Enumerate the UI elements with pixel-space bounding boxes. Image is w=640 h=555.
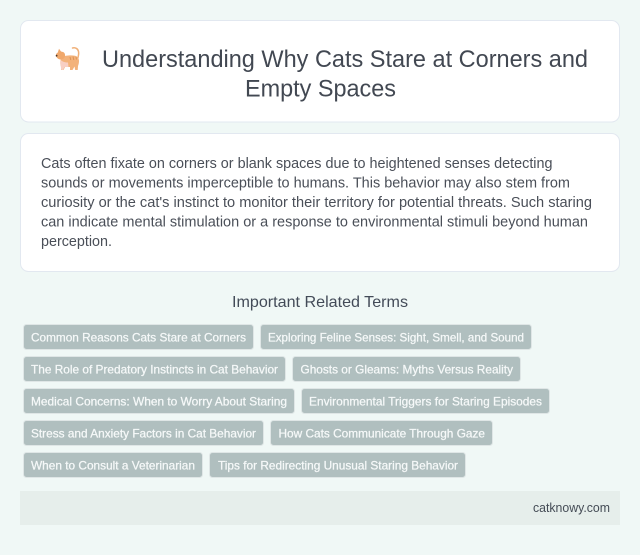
text block: description: Cats often fixate on corners or blank spaces due to heightened senses detecting — [41, 156, 552, 172]
tag — [24, 356, 286, 382]
tag: When to Consult a Veterinarian — [31, 458, 195, 472]
icon: cat — [56, 48, 79, 70]
tag — [24, 324, 254, 350]
tag: Environmental Triggers for Staring Episodes — [309, 394, 542, 408]
tag: Tips for Redirecting Unusual Staring Behavior — [218, 458, 458, 472]
tag — [270, 420, 492, 446]
text block: description: perception. — [41, 234, 112, 250]
tag: Medical Concerns: When to Worry About Staring — [31, 394, 287, 408]
title — [102, 46, 588, 102]
text block: description: sounds or movements imperceptible to humans. This behavior may also stem from — [41, 176, 570, 192]
text block: description: can indicate mental stimulation or a response to environmental stimuli beyond human — [41, 214, 588, 230]
panel: title card — [20, 20, 620, 122]
text block: description — [41, 156, 592, 250]
tag: How Cats Communicate Through Gaze — [278, 426, 485, 440]
tag — [292, 356, 520, 382]
heading: related terms: Important Related Terms — [232, 294, 408, 311]
tag list — [24, 324, 550, 478]
text block: description: curiosity or the cat's instinct to monitor their territory for potential threats. Such staring — [41, 195, 592, 211]
tag: Stress and Anxiety Factors in Cat Behavior — [31, 426, 256, 440]
tag — [24, 388, 294, 414]
tag — [24, 420, 264, 446]
tag: Ghosts or Gleams: Myths Versus Reality — [300, 362, 513, 376]
tag: Common Reasons Cats Stare at Corners — [31, 330, 246, 344]
tag: Exploring Feline Senses: Sight, Smell, and Sound — [268, 330, 524, 344]
tag — [260, 324, 532, 350]
footer source: catknowy.com — [533, 501, 610, 515]
panel: description — [20, 134, 620, 272]
tag: The Role of Predatory Instincts in Cat Behavior — [31, 362, 278, 376]
tag — [302, 388, 550, 414]
footer — [20, 491, 620, 525]
tag — [210, 452, 466, 478]
tag — [24, 452, 202, 478]
title: Empty Spaces — [245, 76, 396, 102]
title: Understanding Why Cats Stare at Corners and — [102, 46, 588, 73]
